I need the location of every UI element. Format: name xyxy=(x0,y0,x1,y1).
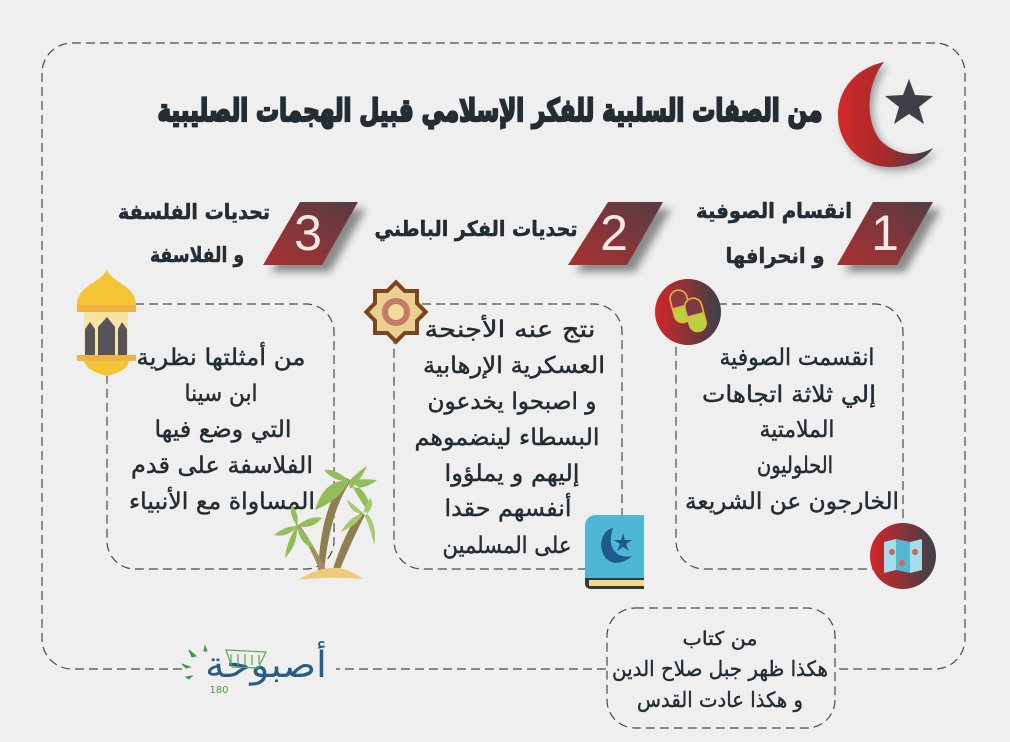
panel: heading 3: تحديات الفلسفة xyxy=(118,200,270,224)
panel: column 2 text box: إليهم و يملؤوا xyxy=(444,461,580,487)
panel: source box xyxy=(607,608,835,728)
panel: column 1 text box: الخارجون عن الشريعة xyxy=(685,489,899,515)
panel: column 2 text box: و اصبحوا يخدعون xyxy=(428,389,596,415)
panel: heading 2 xyxy=(374,202,671,272)
outer dashed frame xyxy=(42,43,965,669)
panel: column 2 text box: أنفسهم حقدا xyxy=(444,493,572,522)
panel: heading 3: و الفلاسفة xyxy=(150,243,244,267)
panel: column 1 text box: إلي ثلاثة اتجاهات xyxy=(702,382,876,408)
icon: eight-point star xyxy=(363,279,429,345)
panel: source box: هكذا ظهر جبل صلاح الدين xyxy=(612,657,828,681)
panel: column 3 text box: من أمثلتها نظرية xyxy=(136,342,306,371)
panel: column 1 text box: انقسمت الصوفية xyxy=(720,345,874,371)
panel: column 1 text box xyxy=(676,304,903,569)
icon: pills circle xyxy=(655,279,721,345)
panel: column 1 text box: الحلوليون xyxy=(757,453,833,479)
panel: column 3 text box: الفلاسفة على قدم xyxy=(131,453,313,479)
icon: palm trees xyxy=(274,466,377,580)
panel: source box: و هكذا عادت القدس xyxy=(637,688,803,712)
icon: crescent and star xyxy=(838,62,937,171)
panel: heading 1: انقسام الصوفية xyxy=(696,199,852,223)
logo xyxy=(182,641,327,696)
panel: column 3 text box xyxy=(107,304,334,569)
panel: column 3 text box: المساواة مع الأنبياء xyxy=(129,487,315,515)
panel: heading 1: 1 xyxy=(871,205,899,261)
panel: column 2 text box: نتج عنه الأجنحة xyxy=(424,315,596,343)
panel: source box: من كتاب xyxy=(682,628,758,650)
panel: column 1 text box: الملامتية xyxy=(760,417,834,443)
panel: column 3 text box: التي وضع فيها xyxy=(154,417,292,443)
panel: heading 1 xyxy=(696,199,941,272)
logo: أصبوحة xyxy=(205,641,327,686)
panel: column 2 text box xyxy=(394,304,622,569)
icon: lantern xyxy=(77,269,136,376)
panel: heading 1: و انحرافها xyxy=(726,244,824,268)
panel: column 2 text box: البسطاء لينضموهم xyxy=(414,425,600,451)
panel: column 2 text box: العسكرية الإرهابية xyxy=(423,353,605,379)
panel: column 2 text box: على المسلمين xyxy=(442,533,572,559)
icon: book xyxy=(585,515,644,589)
panel: heading 3 xyxy=(118,200,366,272)
panel: heading 2: تحديات الفكر الباطني xyxy=(374,217,578,241)
icon: map circle xyxy=(870,523,936,589)
panel: column 3 text box: ابن سينا xyxy=(184,381,258,407)
panel: heading 3: 3 xyxy=(294,205,322,261)
panel: heading 2: 2 xyxy=(600,205,628,261)
logo: 180 xyxy=(209,685,229,696)
